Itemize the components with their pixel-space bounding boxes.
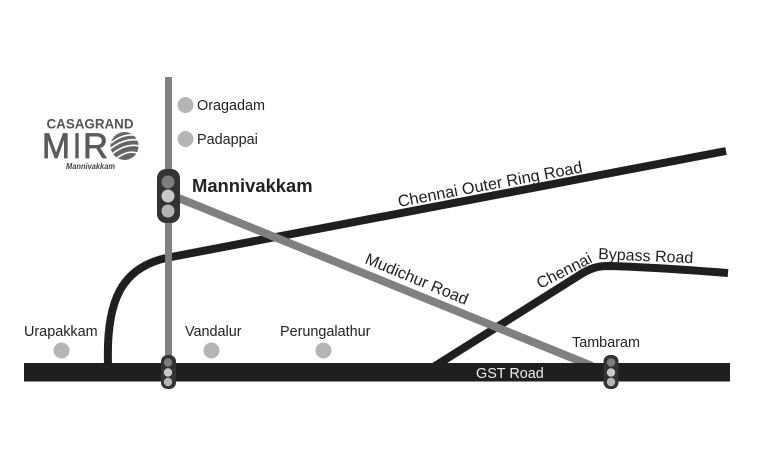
traffic light: Vandalur junction bbox=[161, 355, 176, 389]
label: Chennai Bypass Road bbox=[534, 246, 694, 293]
traffic light: Tambaram bbox=[604, 355, 618, 389]
logo letters: MIR bbox=[42, 127, 108, 166]
logo: Casagrand Miro: CASAGRAND bbox=[46, 116, 134, 132]
place: Urapakkam bbox=[24, 324, 98, 358]
label: Chennai Outer Ring Road: Chennai Outer Ring Road bbox=[396, 158, 584, 211]
road: Chennai Outer Ring Road bbox=[108, 151, 726, 364]
road: vertical grey road bbox=[165, 77, 172, 367]
label: GST Road: GST Road bbox=[476, 366, 544, 382]
place: Vandalur bbox=[185, 324, 242, 358]
label: Mudichur Road: Mudichur Road bbox=[362, 250, 471, 309]
logo location text: Mannivakkam bbox=[66, 162, 115, 171]
place heading: Mannivakkam: Mannivakkam bbox=[192, 175, 313, 196]
place: Vandalur: Vandalur bbox=[185, 324, 242, 340]
logo letters: MIR: M bbox=[42, 127, 70, 166]
place: Padappai: Padappai bbox=[197, 132, 258, 148]
logo letters: MIR: R bbox=[83, 127, 108, 166]
road: Mudichur Road bbox=[176, 197, 592, 366]
label: Chennai Bypass Road: Chennai bbox=[534, 250, 595, 293]
place: Oragadam: Oragadam bbox=[197, 98, 265, 114]
road: Chennai Bypass Road bbox=[435, 266, 728, 366]
traffic light: Mannivakkam bbox=[157, 169, 180, 223]
logo emblem: striped globe bbox=[110, 132, 139, 160]
road: GST Road bbox=[24, 363, 730, 382]
label: Chennai Bypass Road: Bypass Road bbox=[598, 246, 694, 267]
place: Urapakkam: Urapakkam bbox=[24, 324, 98, 340]
place: Perungalathur: Perungalathur bbox=[280, 324, 371, 340]
place: Tambaram: Tambaram bbox=[572, 335, 640, 351]
place: Perungalathur bbox=[280, 324, 371, 358]
logo letters: MIR: I bbox=[73, 127, 81, 166]
logo: Casagrand Miro bbox=[42, 116, 139, 171]
